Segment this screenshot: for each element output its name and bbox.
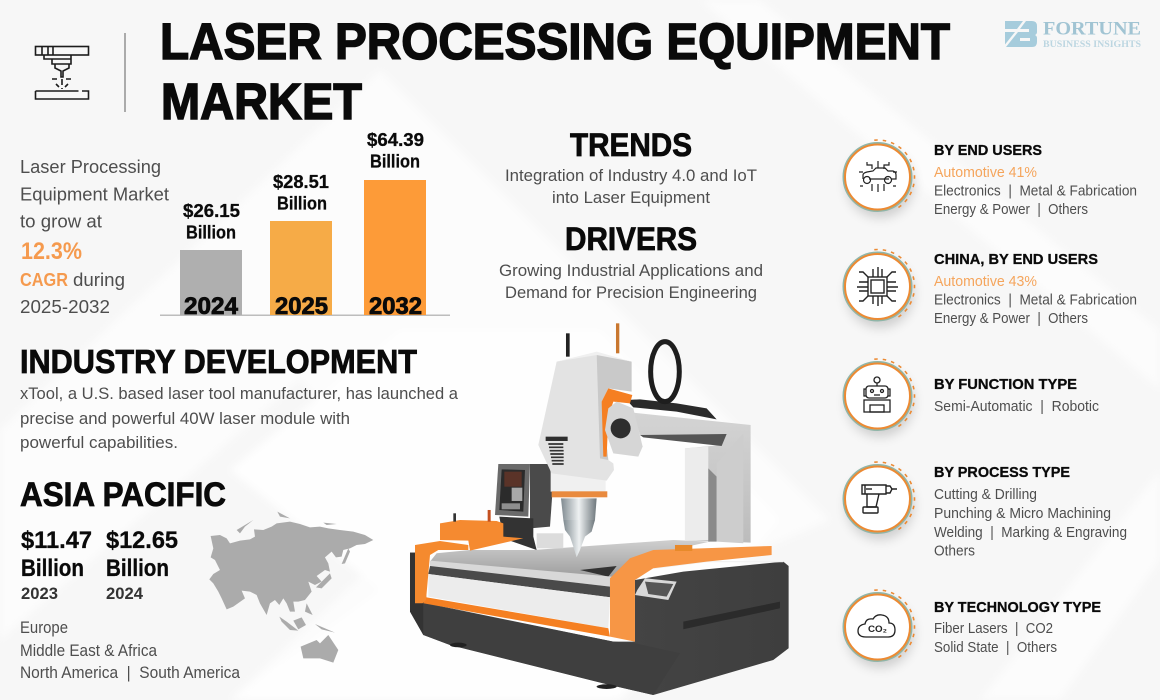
bar: 2032 [364, 130, 426, 320]
bar: 2032: 2032 [369, 293, 422, 320]
text: CAGR summary: during [73, 269, 125, 290]
icon: laser cutting head [36, 46, 88, 99]
bar: 2025: $28.51 [273, 172, 329, 192]
segment: by end users [837, 137, 1137, 218]
bar: 2032: $64.39 [367, 130, 424, 150]
text: CAGR summary [20, 156, 169, 317]
drivers [499, 221, 763, 302]
segment: by technology type: Fiber Lasers | CO2 [934, 621, 1053, 637]
text: CAGR summary: 12.3% [21, 238, 82, 265]
bar: 2025: Billion [277, 194, 327, 214]
industry development: INDUSTRY DEVELOPMENT [20, 343, 417, 380]
segment: china by end users: Energy & Power | Others [934, 311, 1088, 327]
value 2024: $12.65 [106, 527, 178, 554]
value 2023 [21, 527, 92, 603]
control panel [495, 464, 530, 517]
segment: by process type: Welding | Marking & Engraving [934, 525, 1127, 541]
bar: 2024: $26.15 [183, 201, 240, 221]
segment: by function type: Semi-Automatic | Robotic [934, 399, 1099, 415]
segment: by process type: Others [934, 544, 975, 560]
orange side rails [415, 541, 772, 642]
title: MARKET [161, 73, 362, 130]
trends: into Laser Equipment [552, 189, 710, 207]
icon: CO2 cloud: CO₂ [868, 624, 887, 634]
other regions [20, 619, 241, 682]
segment: by process type [837, 459, 1127, 560]
segment: china by end users: Electronics | Metal & Fabrication [934, 292, 1137, 308]
drivers: DRIVERS [565, 221, 697, 257]
logo mark [1003, 21, 1037, 47]
icon: robot [837, 356, 918, 436]
laser nozzle [561, 498, 597, 557]
industry development: powerful capabilities. [20, 433, 178, 452]
header divider [124, 33, 126, 112]
machine base [410, 553, 789, 695]
machine bed [423, 540, 710, 637]
segment: by end users: Automotive 41% [934, 165, 1037, 181]
value 2024 [106, 527, 178, 603]
trends: Integration of Industry 4.0 and IoT [505, 167, 757, 185]
value 2023: 2023 [21, 585, 58, 603]
text: CAGR summary: Equipment Market [20, 184, 169, 204]
bar: 2025 [270, 172, 332, 320]
cable loop [651, 342, 679, 402]
logo: Fortune Business Insights: BUSINESS INSIGHTS [1043, 40, 1141, 50]
value 2024: 2024 [106, 585, 144, 603]
text: CAGR summary: Laser Processing [20, 156, 161, 177]
segment: by end users: BY END USERS [934, 142, 1042, 159]
segment: by function type [837, 356, 1099, 436]
segment: china by end users [837, 246, 1137, 327]
bar: 2025: 2025 [275, 293, 328, 320]
segment: by function type: BY FUNCTION TYPE [934, 376, 1077, 393]
segment: china by end users: CHINA, BY END USERS [934, 251, 1098, 268]
segment: by process type: BY PROCESS TYPE [934, 464, 1070, 481]
value 2023: $11.47 [21, 527, 92, 554]
bar chart [160, 130, 450, 320]
segment: by process type: Cutting & Drilling [934, 487, 1037, 503]
other regions: Middle East & Africa [20, 642, 158, 660]
icon: CO2 cloud [837, 587, 918, 667]
industry development: xTool, a U.S. based laser tool manufacturer, has launched a [20, 384, 459, 403]
bar: 2032: Billion [370, 152, 420, 172]
bar: 2024: 2024 [184, 293, 239, 320]
segment: by technology type: Solid State | Others [934, 640, 1057, 656]
title: LASER PROCESSING EQUIPMENT [160, 13, 950, 70]
segment: by technology type: BY TECHNOLOGY TYPE [934, 599, 1101, 616]
value 2023: Billion [21, 555, 84, 582]
segment: by technology type [837, 587, 1101, 667]
segment: by end users: Electronics | Metal & Fabrication [934, 184, 1137, 200]
industry development [20, 343, 459, 452]
drivers: Growing Industrial Applications and [499, 262, 763, 280]
trends [505, 127, 757, 207]
gantry arm [627, 399, 751, 543]
bar: 2024 [180, 201, 242, 320]
segment: china by end users: Automotive 43% [934, 274, 1037, 290]
asia pacific [20, 476, 241, 682]
other regions: North America | South America [20, 664, 241, 682]
segment: by process type: Punching & Micro Machining [934, 506, 1111, 522]
drivers: Demand for Precision Engineering [505, 284, 757, 302]
machine illustration [410, 323, 789, 695]
icon: drill [837, 459, 918, 539]
orange control box [440, 510, 523, 551]
map: Asia Pacific [209, 512, 373, 663]
text: CAGR summary: CAGR [20, 269, 68, 290]
industry development: precise and powerful 40W laser module with [20, 409, 350, 428]
bar: 2024: Billion [186, 222, 236, 242]
control housing [499, 464, 563, 550]
laser head [538, 323, 643, 497]
text: CAGR summary: to grow at [20, 210, 102, 232]
logo: Fortune Business Insights: FORTUNE [1043, 18, 1141, 40]
icon: car circuit [837, 137, 918, 217]
segment: by end users: Energy & Power | Others [934, 202, 1088, 218]
title [160, 13, 950, 130]
value 2024: Billion [106, 555, 169, 582]
trends: TRENDS [570, 127, 692, 163]
icon: chip [837, 246, 918, 327]
text: CAGR summary: 2025-2032 [20, 296, 110, 317]
other regions: Europe [20, 619, 68, 637]
asia pacific: ASIA PACIFIC [20, 476, 226, 514]
logo: Fortune Business Insights [1003, 18, 1141, 50]
